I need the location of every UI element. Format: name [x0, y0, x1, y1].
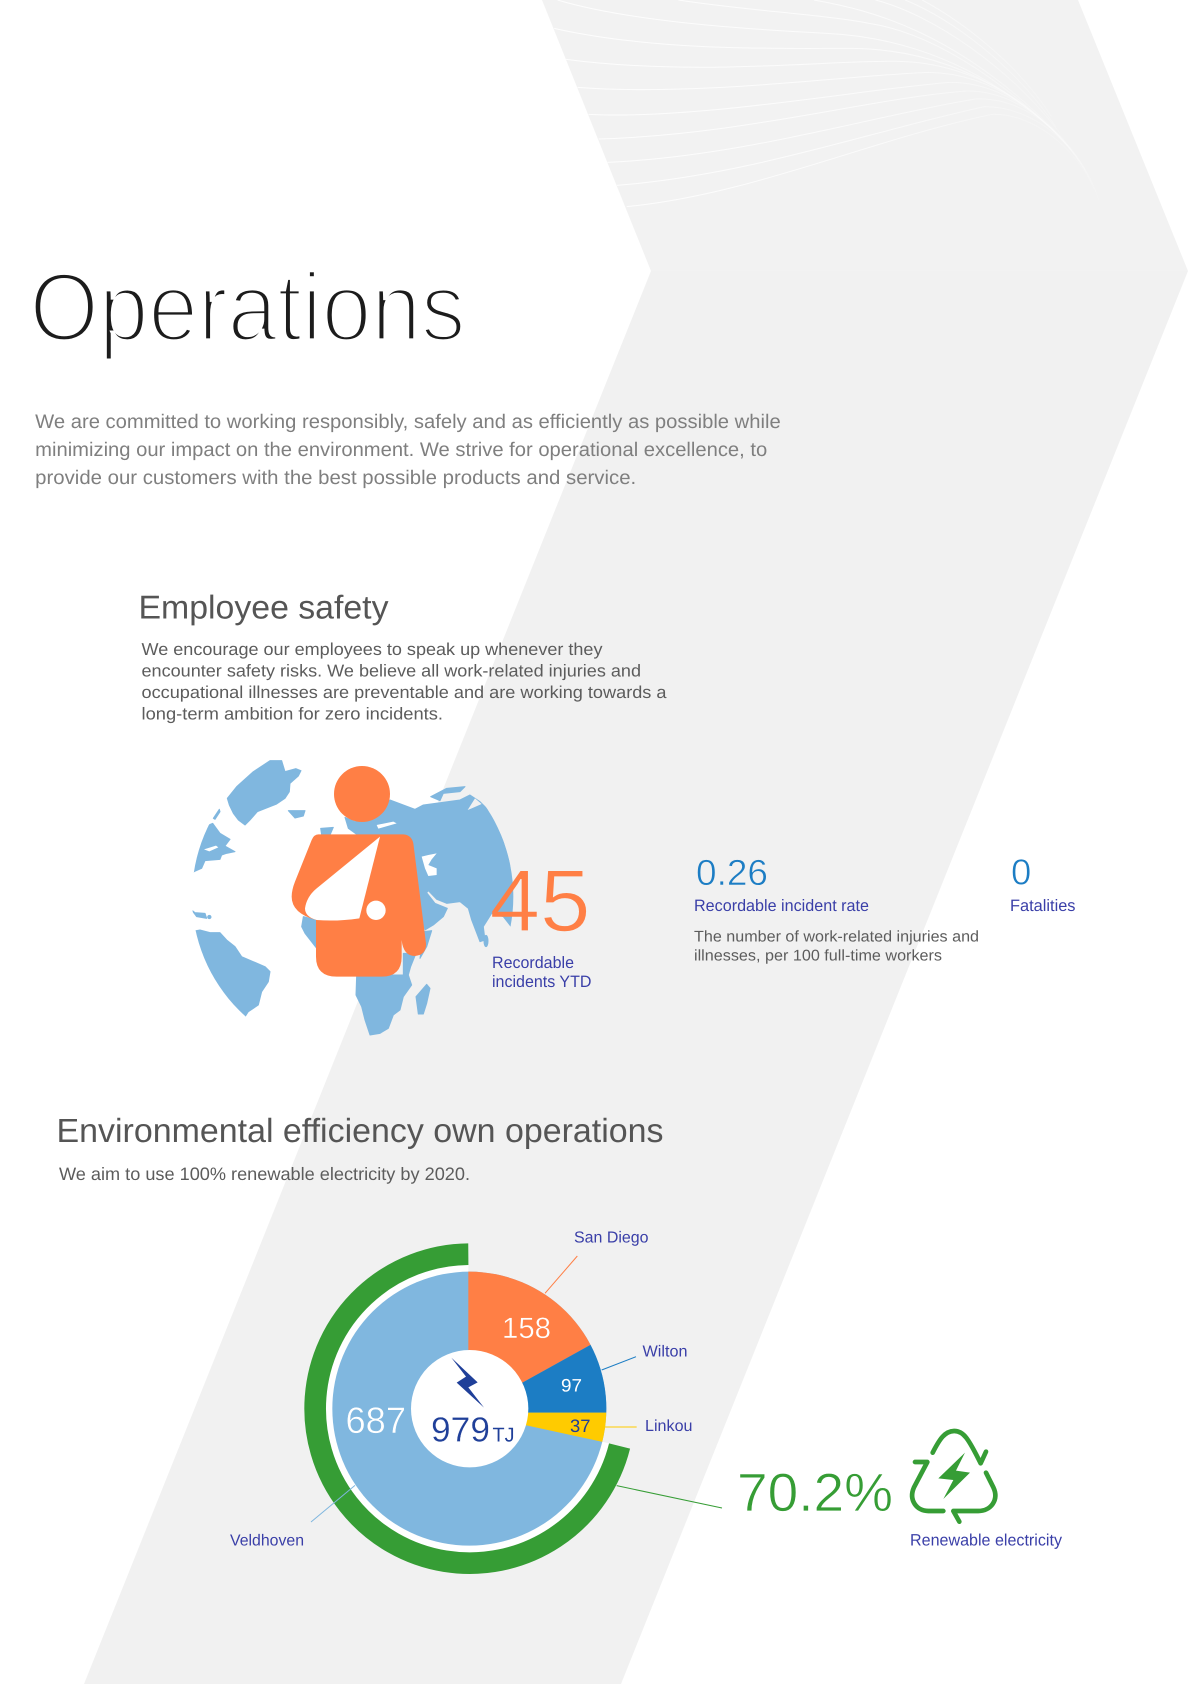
- renewable share ring: [315, 1254, 620, 1563]
- North America: [194, 822, 236, 873]
- donut chart: energy by site: 97: [561, 1376, 582, 1396]
- stat: 0 fatalities: Fatalities: [1010, 897, 1076, 915]
- employee safety text: occupational illnesses are preventable and are working towards a: [142, 682, 667, 702]
- icon: person with arm sling: [292, 766, 426, 977]
- icon: lightning bolt: [451, 1358, 484, 1408]
- stat: 0 fatalities: 0: [1011, 852, 1031, 892]
- stat: 0.26 recordable incident rate: Recordable incident rate: [694, 897, 869, 915]
- environmental text: We aim to use 100% renewable electricity by 2020.: [59, 1164, 470, 1184]
- stat: 0.26 recordable incident rate: illnesses, per 100 full-time workers: [694, 948, 942, 964]
- employee safety text: We encourage our employees to speak up whenever they: [142, 639, 603, 659]
- world map globe: [188, 761, 515, 1035]
- employee safety text: [142, 639, 667, 724]
- site labels: Veldhoven: [230, 1532, 304, 1550]
- stat: 45 recordable incidents: 45: [490, 851, 590, 950]
- donut chart: energy by site: 979: [431, 1410, 490, 1450]
- Africa: [302, 917, 317, 948]
- stat: 0.26 recordable incident rate: 0.26: [696, 852, 768, 893]
- donut chart: energy by site: 687: [346, 1400, 406, 1441]
- employee safety text: encounter safety risks. We believe all work-related injuries and: [142, 660, 641, 680]
- intro text: We are committed to working responsibly, safely and as efficiently as possible while: [35, 411, 781, 433]
- centre disc: [411, 1350, 528, 1467]
- value labels: 158: [502, 1312, 551, 1345]
- title: Operations: [30, 252, 466, 362]
- site labels: [230, 1230, 692, 1550]
- intro text: provide our customers with the best possible products and service.: [35, 467, 636, 489]
- pie slices: [332, 1272, 606, 1546]
- icon: recycling with bolt: [912, 1431, 995, 1522]
- stat: 45 recordable incidents: incidents YTD: [492, 973, 592, 991]
- South America: [190, 930, 270, 1019]
- donut chart: energy by site: TJ: [492, 1424, 514, 1446]
- leader lines: [311, 1256, 722, 1522]
- stat: 0.26 recordable incident rate: The number of work-related injuries and: [694, 928, 979, 946]
- stat: 45 recordable incidents: [492, 871, 591, 988]
- stat: 0.26 recordable incident rate: [694, 852, 979, 964]
- stat: 70.2% renewable electricity: 70.2%: [737, 1463, 893, 1523]
- site labels: Linkou: [645, 1418, 692, 1435]
- heading: employee safety: Employee safety: [138, 588, 389, 626]
- Eurasia: [345, 795, 515, 942]
- stat: 45 recordable incidents: Recordable: [492, 954, 574, 972]
- donut chart: energy by site: [230, 1230, 722, 1563]
- intro text: minimizing our impact on the environment. We strive for operational excellence, to: [35, 439, 767, 461]
- site labels: San Diego: [574, 1230, 649, 1246]
- stat: 0 fatalities: [1010, 852, 1076, 915]
- intro text: [35, 411, 781, 489]
- donut chart: energy by site: 37: [570, 1416, 590, 1436]
- employee safety text: long-term ambition for zero incidents.: [142, 704, 443, 724]
- heading: environmental efficiency: Environmental efficiency own operations: [56, 1113, 664, 1150]
- site labels: Wilton: [642, 1344, 688, 1360]
- Greenland: [227, 761, 301, 825]
- label: renewable electricity: Renewable electricity: [910, 1532, 1063, 1550]
